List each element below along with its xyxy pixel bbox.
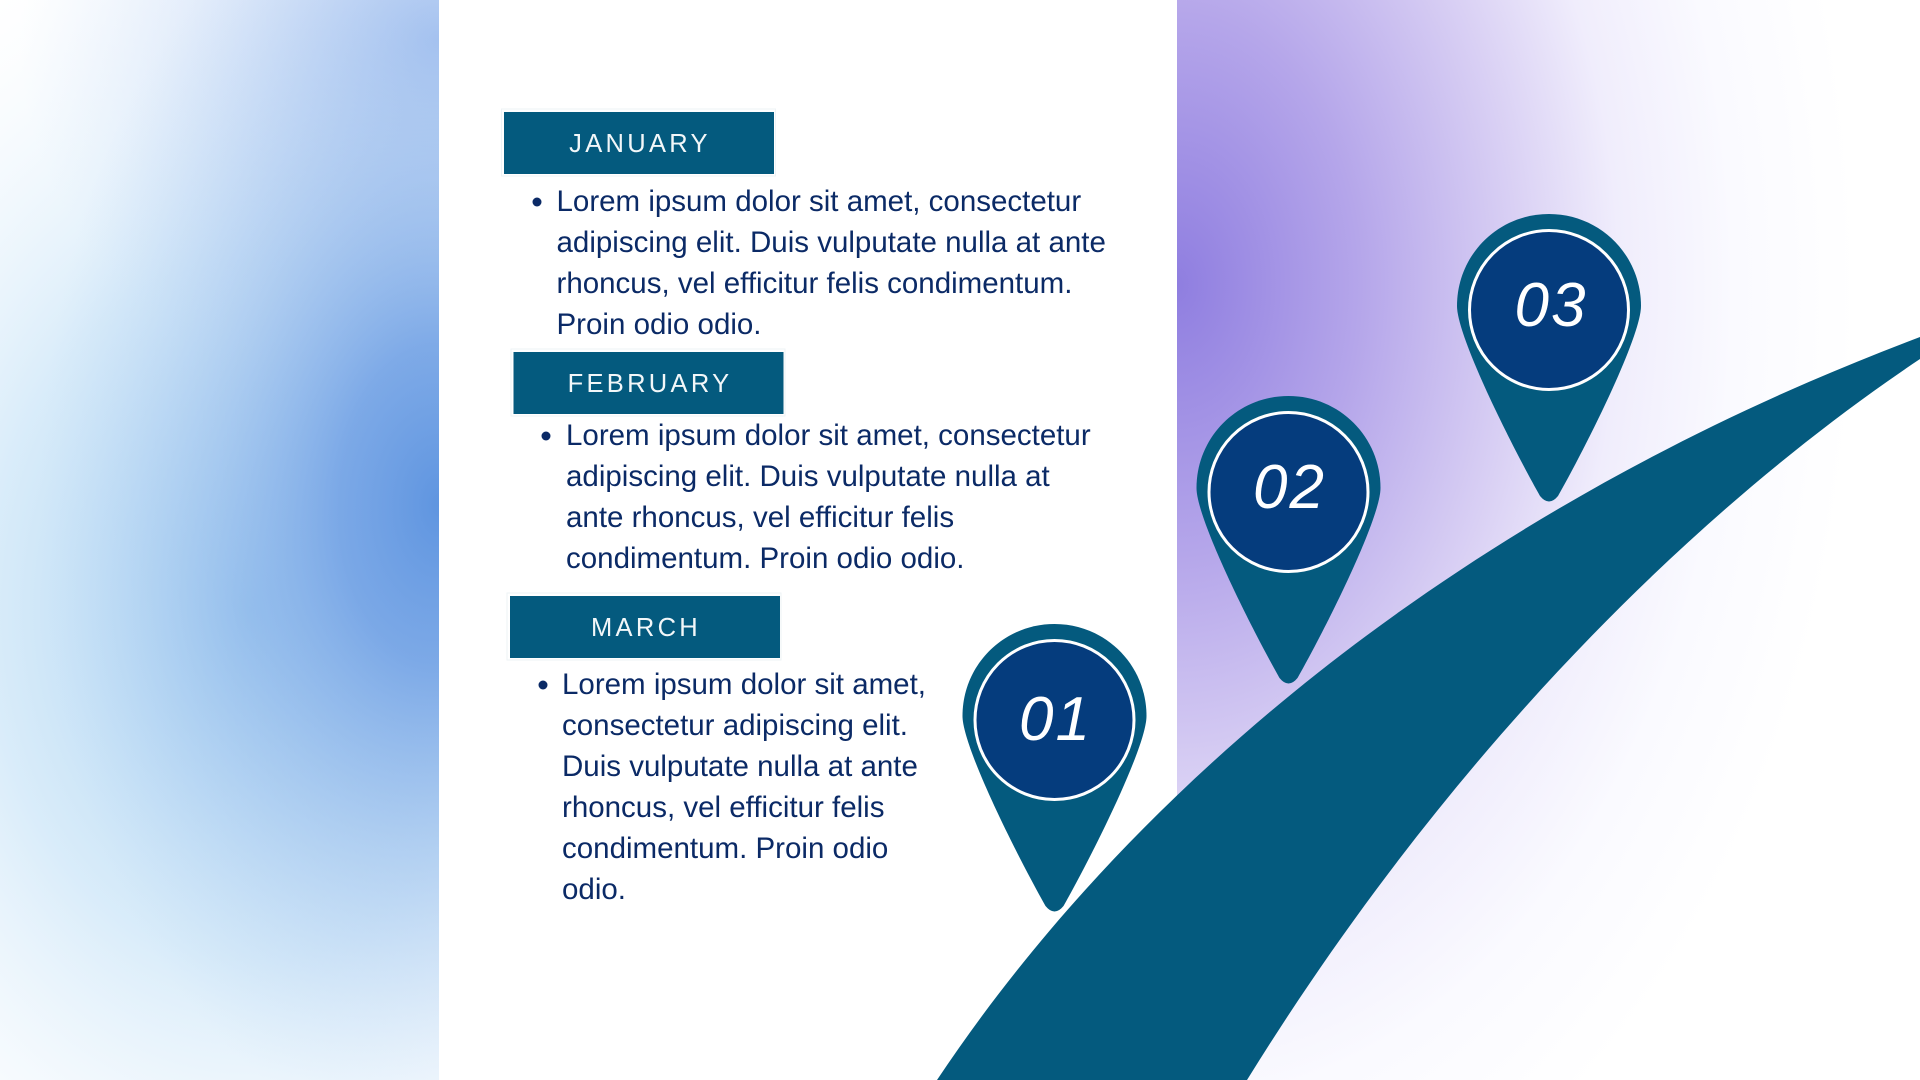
- text: January bullet: Lorem ipsum dolor sit amet, consectetur: [556, 185, 1081, 218]
- text: February bullet: adipiscing elit. Duis vulputate nulla at: [566, 460, 1050, 493]
- text: February bullet: [542, 419, 1091, 575]
- pin: 03: 03: [1515, 271, 1587, 340]
- section: February: [511, 349, 1091, 575]
- pin: 01: [962, 624, 1146, 912]
- text: March bullet: Lorem ipsum dolor sit amet,: [562, 668, 926, 701]
- label: March: MARCH: [591, 614, 701, 642]
- pin: 02: 02: [1253, 453, 1326, 522]
- label: January: JANUARY: [569, 130, 711, 158]
- text: January bullet: adipiscing elit. Duis vulputate nulla at ante: [556, 226, 1106, 259]
- text: March bullet: Duis vulputate nulla at ante: [562, 750, 918, 783]
- text: March bullet: consectetur adipiscing elit.: [562, 709, 908, 742]
- text: February bullet: condimentum. Proin odio odio.: [566, 542, 964, 575]
- label: March: [507, 593, 781, 660]
- text: January bullet: Proin odio odio.: [556, 308, 762, 341]
- text: February bullet: ante rhoncus, vel efficitur felis: [566, 501, 954, 534]
- text: March bullet: condimentum. Proin odio: [562, 832, 888, 865]
- pin: 02: [1196, 396, 1380, 684]
- label: February: FEBRUARY: [568, 370, 732, 398]
- section: March: [507, 593, 926, 906]
- panel: left blue gradient: [0, 0, 439, 1080]
- text: March bullet: odio.: [562, 873, 626, 906]
- text: March bullet: [538, 668, 926, 906]
- ribbon road: [937, 337, 1920, 1080]
- label: January: [502, 109, 776, 176]
- text: January bullet: [532, 185, 1106, 341]
- section: January: [502, 109, 1106, 341]
- panel: right purple gradient: [1177, 0, 1920, 1080]
- label: February: [511, 349, 785, 416]
- pin: 01: 01: [1019, 685, 1092, 754]
- pin: 03: [1457, 214, 1641, 502]
- text: January bullet: rhoncus, vel efficitur felis condimentum.: [556, 267, 1072, 300]
- text: March bullet: rhoncus, vel efficitur felis: [562, 791, 884, 824]
- text: February bullet: Lorem ipsum dolor sit amet, consectetur: [566, 419, 1091, 452]
